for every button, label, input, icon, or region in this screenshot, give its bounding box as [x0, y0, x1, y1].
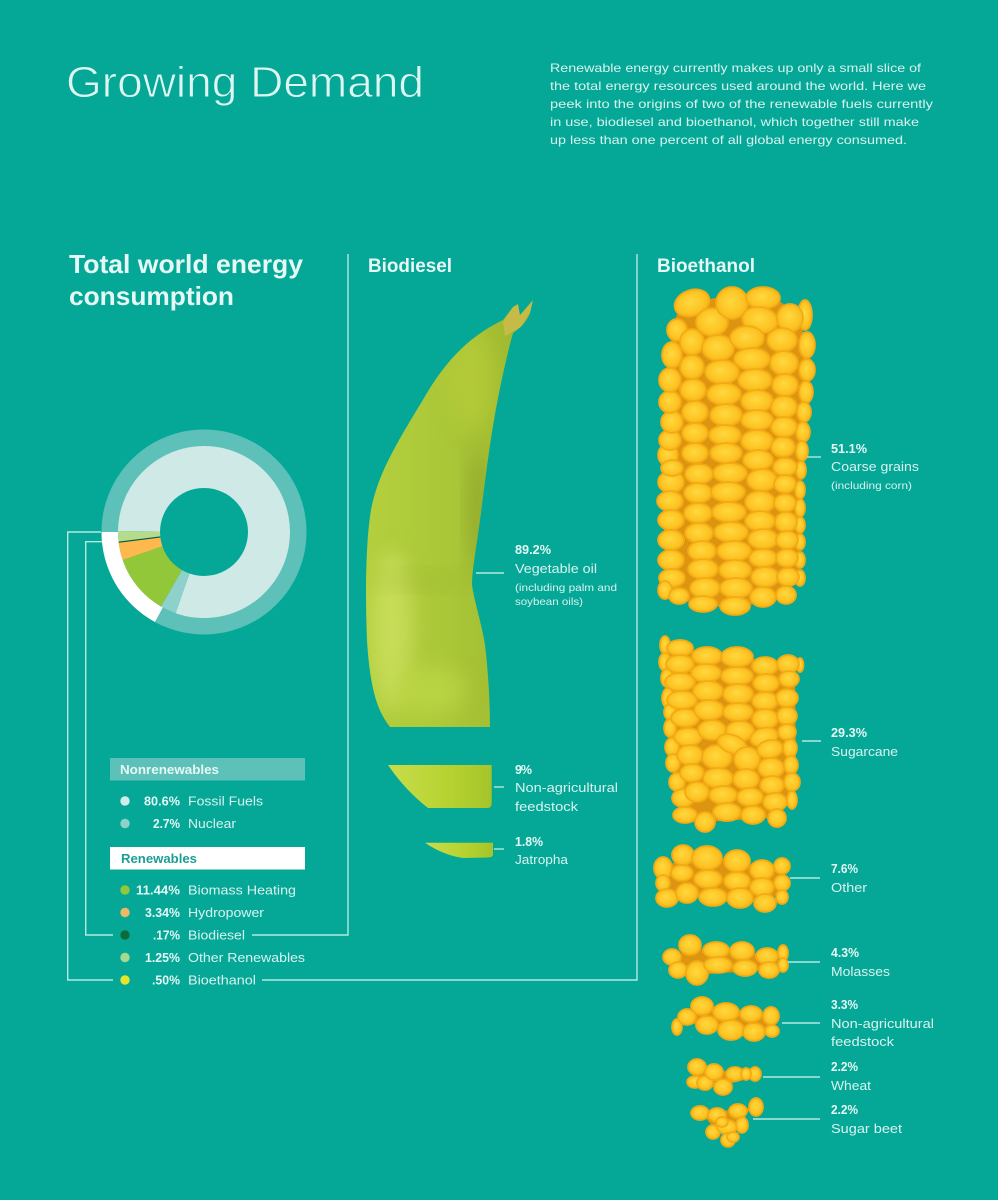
label: other: Other [831, 881, 867, 895]
legend [110, 758, 305, 988]
intro text: Renewable energy currently makes up only a small slice of [550, 61, 922, 75]
label: jatropha [515, 835, 568, 867]
legend item: biodiesel: .17% [153, 928, 180, 942]
legend header: nonrenewables [110, 758, 305, 780]
intro text [550, 61, 933, 147]
legend item: nuclear: Nuclear [188, 817, 236, 831]
label: non-agricultural feedstock [515, 763, 618, 814]
legend item: nuclear: 2.7% [153, 817, 180, 831]
label: sugarcane: Sugarcane [831, 745, 898, 759]
legend item: bioethanol: .50% [152, 974, 180, 988]
heading: total world energy consumption [69, 249, 304, 311]
connector: bioethanol line [68, 254, 637, 980]
slice: other renewables [118, 531, 160, 542]
illustration: corn non-agricultural piece [672, 997, 779, 1041]
legend header: nonrenewables: Nonrenewables [120, 763, 219, 777]
label: corn non-agricultural feedstock: Non-agricultural [831, 1017, 934, 1031]
label: molasses: Molasses [831, 965, 890, 979]
leader: sugarcane [802, 740, 821, 742]
label: corn non-agricultural feedstock [831, 998, 934, 1049]
label: non-agricultural feedstock: 9% [515, 763, 532, 777]
leader: jatropha [494, 848, 504, 850]
leader: wheat [763, 1076, 820, 1078]
legend item: bioethanol: Bioethanol [188, 974, 256, 988]
legend header: renewables: Renewables [121, 852, 197, 866]
connector: biodiesel line [86, 254, 348, 935]
leader: molasses [788, 961, 820, 963]
label: molasses [831, 946, 890, 979]
label: other: 7.6% [831, 862, 858, 876]
illustration: corn sugarcane piece [659, 636, 804, 832]
legend item: fossil fuels: Fossil Fuels [188, 794, 263, 808]
legend item: biodiesel [120, 928, 245, 942]
leader: coarse grains [807, 456, 821, 458]
outer ring: nonrenewables [110, 438, 298, 626]
intro text: the total energy resources used around the world. Here we [550, 79, 926, 93]
illustration: bean pod top piece [360, 295, 540, 730]
slice: nuclear [161, 570, 190, 613]
label: wheat: Wheat [831, 1079, 872, 1093]
legend item: other renewables: 1.25% [145, 951, 180, 965]
leader: other [790, 877, 820, 879]
illustration: corn wheat piece [687, 1059, 761, 1095]
label: jatropha: Jatropha [515, 853, 568, 867]
label: other [831, 862, 867, 895]
label: vegetable oil: soybean oils) [515, 596, 583, 608]
intro text: in use, biodiesel and bioethanol, which together still make [550, 115, 919, 129]
heading: bioethanol: Bioethanol [657, 256, 755, 277]
illustration: bean slice 3 [425, 843, 493, 858]
leader: sugar beet [753, 1118, 820, 1120]
label: wheat [831, 1060, 872, 1093]
label: corn non-agricultural feedstock: 3.3% [831, 998, 858, 1012]
intro text: peek into the origins of two of the renewable fuels currently [550, 97, 933, 111]
label: sugar beet [831, 1103, 903, 1136]
label: coarse grains [831, 442, 919, 492]
leader: vegetable oil [476, 572, 504, 574]
label: non-agricultural feedstock: Non-agricultural [515, 781, 618, 795]
intro text: up less than one percent of all global energy consumed. [550, 133, 907, 147]
legend item: other renewables [120, 951, 305, 965]
donut chart [101, 438, 298, 626]
heading: total world energy consumption: consumption [69, 281, 234, 311]
illustration: corn other piece [654, 845, 790, 912]
legend item: hydropower: Hydropower [188, 906, 264, 920]
label: vegetable oil [515, 543, 617, 608]
legend item: fossil fuels: 80.6% [144, 794, 180, 808]
legend item: other renewables: Other Renewables [188, 951, 305, 965]
label: corn non-agricultural feedstock: feedstock [831, 1035, 895, 1049]
legend item: biodiesel: Biodiesel [188, 928, 245, 942]
slice: fossil fuels [118, 446, 290, 618]
label: vegetable oil: (including palm and [515, 582, 617, 594]
label: wheat: 2.2% [831, 1060, 858, 1074]
slice: hydropower [119, 537, 162, 560]
illustration: corn sugar beet piece [691, 1098, 763, 1147]
label: sugar beet: 2.2% [831, 1103, 858, 1117]
legend item: hydropower [120, 906, 264, 920]
legend item: hydropower: 3.34% [145, 906, 180, 920]
illustration: bean slice 2 [388, 765, 492, 808]
slice: biodiesel [119, 537, 160, 542]
legend item: biomass heating: 11.44% [136, 884, 180, 898]
label: sugarcane: 29.3% [831, 726, 867, 740]
illustration: corn molasses piece [663, 935, 788, 985]
leader: corn non-agricultural [782, 1022, 820, 1024]
legend item: fossil fuels [120, 794, 263, 808]
legend item: biomass heating [120, 884, 296, 898]
label: coarse grains: (including corn) [831, 480, 912, 492]
label: coarse grains: Coarse grains [831, 460, 919, 474]
legend header: renewables [110, 847, 305, 870]
label: sugar beet: Sugar beet [831, 1122, 903, 1136]
slice: biomass heating [123, 546, 182, 606]
heading: total world energy consumption: Total world energy [69, 249, 304, 279]
leader: bean non-agricultural [494, 786, 504, 788]
label: molasses: 4.3% [831, 946, 859, 960]
label: vegetable oil: 89.2% [515, 543, 551, 557]
heading: biodiesel: Biodiesel [368, 256, 452, 277]
label: coarse grains: 51.1% [831, 442, 867, 456]
outer ring: renewables [101, 532, 163, 622]
label: vegetable oil: Vegetable oil [515, 562, 597, 576]
legend item: biomass heating: Biomass Heating [188, 884, 296, 898]
title: Growing Demand [66, 58, 424, 107]
legend item: bioethanol [120, 974, 256, 988]
label: non-agricultural feedstock: feedstock [515, 800, 579, 814]
legend item: nuclear [120, 817, 236, 831]
label: sugarcane [831, 726, 898, 759]
label: jatropha: 1.8% [515, 835, 543, 849]
illustration: corn main piece [657, 285, 815, 615]
